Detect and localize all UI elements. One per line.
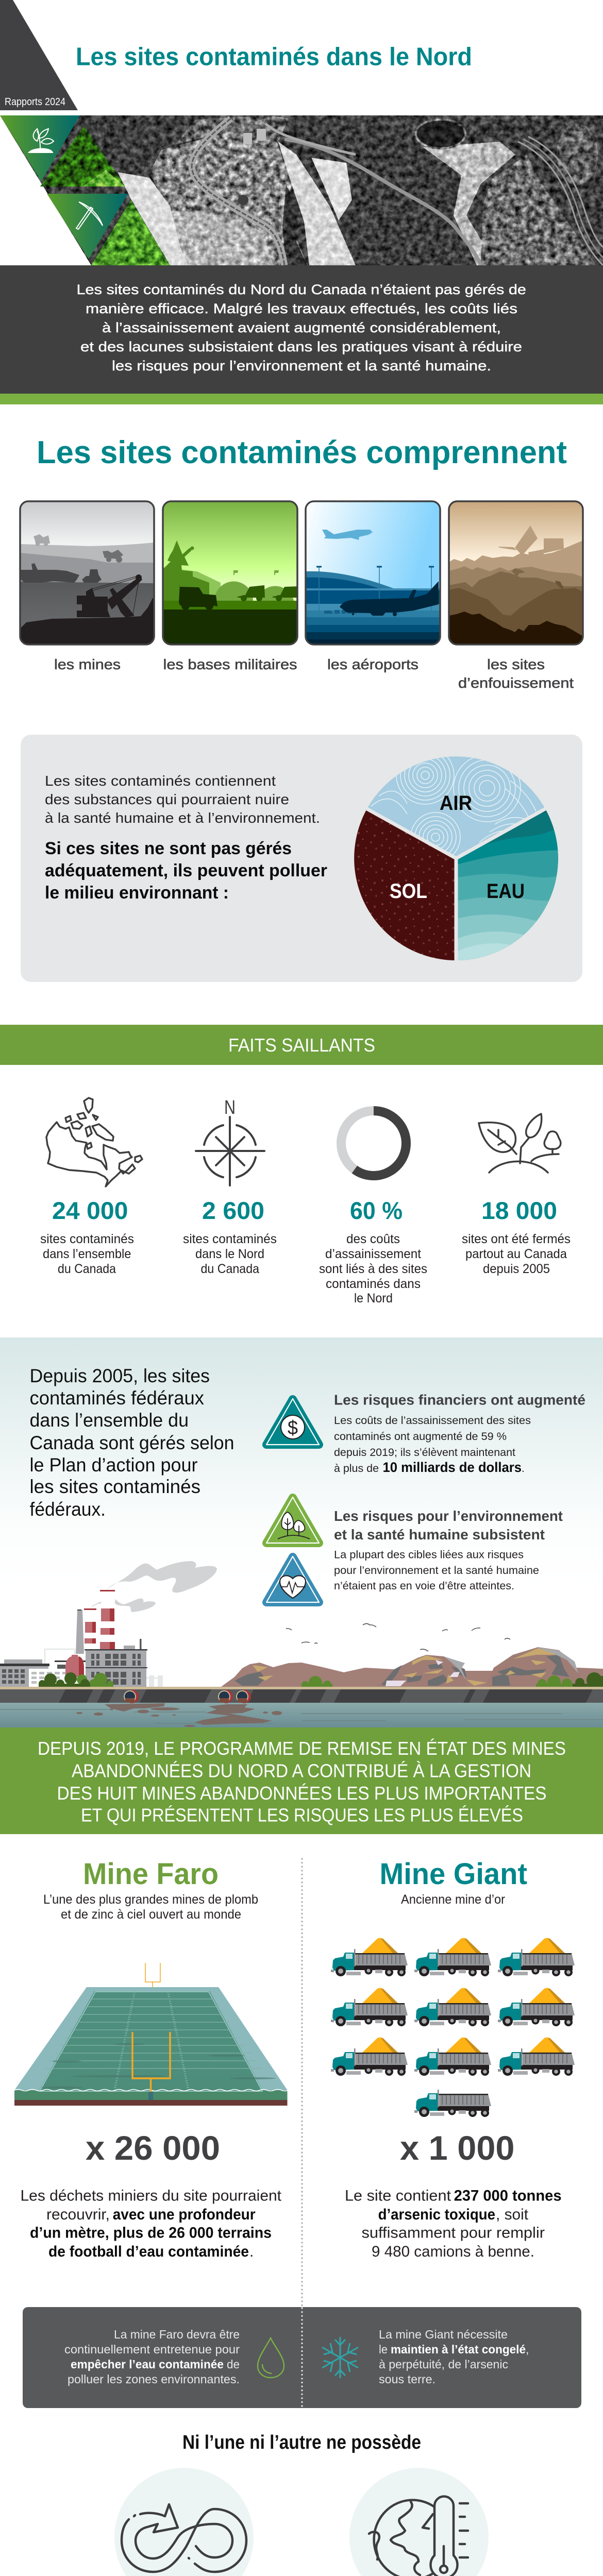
text block: Faro waste: recouvrir,: [46, 2206, 110, 2223]
icon: heart risk triangle: [266, 1556, 319, 1602]
text block: financial risk: .: [522, 1463, 525, 1475]
smoke: [90, 1561, 217, 1612]
text block: action plan: contaminés fédéraux: [30, 1387, 204, 1409]
main building: [86, 1650, 146, 1687]
fact: 24 000: [40, 1098, 142, 1276]
icon: pickaxe: [76, 202, 103, 229]
intro text: Les sites contaminés du Nord du Canada n’étaient pas gérés de: [76, 282, 526, 297]
pie labels: [390, 792, 525, 903]
illustration: factory: [0, 1561, 217, 1688]
card labels: les sites: [487, 656, 545, 672]
text: Faro: [64, 2328, 240, 2386]
text block: action plan: dans l’ensemble du: [30, 1410, 189, 1431]
icon: infinity arrow: [122, 2504, 246, 2572]
caption: des coûts: [346, 1232, 400, 1246]
text block: financial risk: depuis 2019; ils s’élèvent maintenant: [334, 1447, 515, 1459]
text block: financial risk: [334, 1392, 585, 1475]
header tag: dark triangle: [0, 0, 78, 110]
caption: [319, 1232, 427, 1306]
text block: Faro waste: .: [249, 2243, 254, 2260]
icon: Canada map: [46, 1098, 142, 1187]
text block: environment and health risks: La plupart des cibles liées aux risques: [334, 1549, 524, 1561]
pie slice: water: [458, 809, 558, 960]
report label: Rapports 2024: [5, 96, 65, 108]
pie slice: soil: [354, 809, 456, 960]
value: 2 600: [202, 1197, 264, 1224]
description: Ancienne mine d’or: [401, 1892, 505, 1907]
donut chart: [341, 1111, 406, 1176]
red dome: [65, 1655, 84, 1677]
intro text: à l’assainissement avaient augmenté considérablement,: [102, 320, 501, 335]
heading: neither has: Ni l’une ni l’autre ne possède: [182, 2432, 421, 2453]
text block: action plan: fédéraux.: [30, 1499, 106, 1520]
card labels: [54, 656, 574, 691]
text: Giant: le: [379, 2343, 388, 2356]
band: remediation program: DES HUIT MINES ABANDONNÉES LES PLUS IMPORTANTES: [57, 1783, 546, 1804]
text block: warning: Si ces sites ne sont pas gérés: [45, 839, 292, 858]
text: Faro: continuellement entretenue pour: [64, 2343, 240, 2356]
card: mines: [20, 501, 155, 645]
text block: financial risk: Les risques financiers ont augmenté: [334, 1392, 585, 1408]
text: Giant: ,: [526, 2343, 529, 2356]
band: key facts: FAITS SAILLANTS: [228, 1035, 375, 1056]
pie labels: EAU: [487, 880, 525, 903]
card labels: d’enfouissement: [458, 675, 574, 691]
caption: sites contaminés: [40, 1232, 134, 1246]
card: military bases: [163, 501, 298, 645]
icon: water drop: [258, 2338, 284, 2378]
pollution spills: [76, 1703, 282, 1727]
icon: sprout: [29, 129, 54, 152]
item: perpetual maintenance plan: [114, 2468, 254, 2576]
value: 26 000 fields: x 26 000: [86, 2129, 220, 2167]
panel: federal action plan background: [0, 1337, 603, 1585]
description: et de zinc à ciel ouvert au monde: [61, 1907, 241, 1922]
text block: Giant arsenic: suffisamment pour remplir: [362, 2225, 545, 2241]
text block: warning: [45, 839, 327, 903]
text block: environment and health risks: [334, 1508, 563, 1592]
text block: environment and health risks: et la santé humaine subsistent: [334, 1527, 545, 1543]
caption: [40, 1232, 134, 1276]
text block: Faro waste: Les déchets miniers du site pourraient: [21, 2188, 282, 2204]
caption: du Canada: [58, 1262, 116, 1276]
card: landfills: [449, 501, 583, 645]
value: 60 %: [350, 1197, 403, 1224]
caption: le Nord: [354, 1291, 393, 1306]
caption: sites contaminés: [183, 1232, 277, 1246]
band: remediation program: ABANDONNÉES DU NORD A CONTRIBUÉ À LA GESTION: [72, 1760, 531, 1782]
icon: dollar risk triangle: $: [288, 1417, 298, 1439]
birds: [286, 1624, 510, 1651]
text block: Faro waste: de football d’eau contaminée: [48, 2243, 249, 2260]
pie slice: air: [367, 756, 545, 856]
card labels: les mines: [54, 656, 121, 672]
intro text: [76, 282, 526, 374]
illustration: dump trucks: [331, 1938, 575, 2117]
fact: 60 %: [319, 1111, 427, 1306]
text block: action plan: le Plan d’action pour: [30, 1454, 198, 1476]
intro band: [0, 265, 603, 394]
text: Faro: de: [227, 2358, 240, 2371]
description: L’une des plus grandes mines de plomb: [43, 1892, 258, 1907]
description: [43, 1892, 258, 1922]
band: remediation program: DEPUIS 2019, LE PROGRAMME DE REMISE EN ÉTAT DES MINES: [38, 1738, 566, 1759]
text block: Giant arsenic: 237 000 tonnes: [454, 2188, 562, 2204]
card: airports: [306, 501, 440, 645]
caption: dans le Nord: [195, 1247, 264, 1261]
text block: substances: des substances qui pourraient nuire: [45, 791, 289, 807]
caption: dans l’ensemble: [43, 1247, 131, 1261]
text block: Faro waste: [21, 2188, 282, 2260]
text: Giant: à perpétuité, de l’arsenic: [379, 2358, 508, 2371]
caption: [462, 1232, 571, 1276]
aerial photo of a mine site: [0, 115, 603, 265]
panel: substances: [21, 735, 582, 982]
item: climate adaptation: [338, 2468, 499, 2576]
text: Faro: La mine Faro devra être: [114, 2328, 240, 2341]
caption: sites ont été fermés: [462, 1232, 571, 1246]
text block: environment and health risks: n’étaient pas en voie d’être atteintes.: [334, 1580, 514, 1592]
text block: Giant arsenic: [345, 2188, 562, 2260]
text block: warning: le milieu environnant :: [45, 883, 229, 903]
text block: Faro waste: d’un mètre, plus de 26 000 terrains: [30, 2225, 272, 2241]
heading: Faro mine: [43, 1857, 258, 1922]
text block: Faro waste: avec une profondeur: [113, 2206, 256, 2223]
green tinted photo triangles: [40, 126, 170, 265]
text: Giant: maintien à l’état congelé: [391, 2343, 526, 2356]
text block: substances: [45, 773, 320, 826]
bushes: [77, 1673, 113, 1688]
chimneys: [76, 1610, 84, 1654]
text block: Giant arsenic: , soit: [496, 2206, 529, 2223]
gradient triangle with plant icon: [0, 115, 80, 181]
illustration: waste hills and birds: [221, 1624, 603, 1689]
illustration: polluted water and wall: [0, 1687, 603, 1727]
card labels: les aéroports: [327, 656, 418, 672]
icon: compass: N: [224, 1097, 236, 1118]
heading: Giant mine: [379, 1857, 527, 1907]
value: 24 000: [52, 1197, 128, 1224]
text block: financial risk: 10 milliards de dollars: [382, 1460, 522, 1475]
icon: snowflake: [322, 2337, 358, 2378]
card labels: les bases militaires: [163, 656, 297, 672]
fact: 18 000: [462, 1114, 571, 1276]
pie: air, water, soil: [354, 747, 564, 963]
value: 1 000 trucks: x 1 000: [400, 2129, 514, 2167]
caption: depuis 2005: [483, 1262, 550, 1276]
title: Les sites contaminés dans le Nord: [76, 43, 472, 71]
caption: [183, 1232, 277, 1276]
text block: Giant arsenic: Le site contient: [345, 2188, 451, 2204]
pie labels: SOL: [390, 880, 427, 903]
caption: sont liés à des sites: [319, 1262, 427, 1276]
caption: d’assainissement: [325, 1247, 421, 1261]
icon: plants: [479, 1114, 561, 1173]
text block: environment and health risks: pour l’environnement et la santé humaine: [334, 1565, 539, 1577]
text block: financial risk: Les coûts de l’assainissement des sites: [334, 1415, 531, 1427]
band: remediation program: ET QUI PRÉSENTENT LES RISQUES LES PLUS ÉLEVÉS: [81, 1804, 523, 1826]
gradient triangle with pickaxe icon: [47, 194, 128, 259]
icon: trees risk triangle: [266, 1497, 319, 1543]
caption: contaminés dans: [326, 1277, 421, 1291]
drain pipes: [124, 1690, 251, 1703]
text: Faro: polluer les zones environnantes.: [68, 2372, 240, 2386]
pie labels: AIR: [440, 792, 472, 815]
band: remediation program: [0, 1727, 603, 1834]
icon: globe and thermometer: [369, 2497, 468, 2576]
panel: perpetual care: [23, 2307, 581, 2408]
text: Giant: sous terre.: [379, 2372, 435, 2386]
intro text: et des lacunes subsistaient dans les pratiques visant à réduire: [80, 339, 522, 354]
fact: 2 600: [183, 1097, 277, 1276]
heading: Giant mine: Mine Giant: [379, 1857, 527, 1891]
text block: action plan: Depuis 2005, les sites: [30, 1365, 210, 1386]
text block: substances: Les sites contaminés contiennent: [45, 773, 276, 789]
text block: financial risk: contaminés ont augmenté de 59 %: [334, 1431, 507, 1443]
text block: warning: adéquatement, ils peuvent polluer: [45, 861, 327, 880]
intro text: manière efficace. Malgré les travaux effectués, les coûts liés: [86, 301, 517, 316]
icon: dollar risk triangle: [266, 1399, 319, 1445]
left buildings: [55, 1660, 86, 1662]
illustration: flooded football field: [14, 1963, 289, 2106]
pipes background: [45, 1649, 75, 1665]
icon: compass: [196, 1097, 264, 1185]
caption: partout au Canada: [465, 1247, 567, 1261]
text block: substances: à la santé humaine et à l’environnement.: [45, 810, 320, 826]
text block: action plan: les sites contaminés: [30, 1476, 200, 1497]
text block: action plan: [30, 1365, 234, 1520]
heading: sites include: Les sites contaminés comprennent: [37, 435, 567, 470]
text block: financial risk: à plus de: [334, 1463, 379, 1475]
text block: environment and health risks: Les risques pour l’environnement: [334, 1508, 563, 1524]
heading: Faro mine: Mine Faro: [83, 1857, 219, 1891]
band: key facts: [0, 1025, 603, 1065]
intro text: les risques pour l’environnement et la santé humaine.: [112, 358, 491, 374]
text: Faro: empêcher l’eau contaminée: [71, 2358, 224, 2371]
text block: Giant arsenic: d’arsenic toxique: [378, 2206, 495, 2223]
text block: action plan: Canada sont gérés selon: [30, 1432, 234, 1453]
caption: du Canada: [201, 1262, 259, 1276]
text: Giant: [379, 2328, 529, 2386]
text block: Giant arsenic: 9 480 camions à benne.: [372, 2243, 534, 2260]
text: Giant: La mine Giant nécessite: [379, 2328, 508, 2341]
value: 18 000: [481, 1197, 557, 1224]
